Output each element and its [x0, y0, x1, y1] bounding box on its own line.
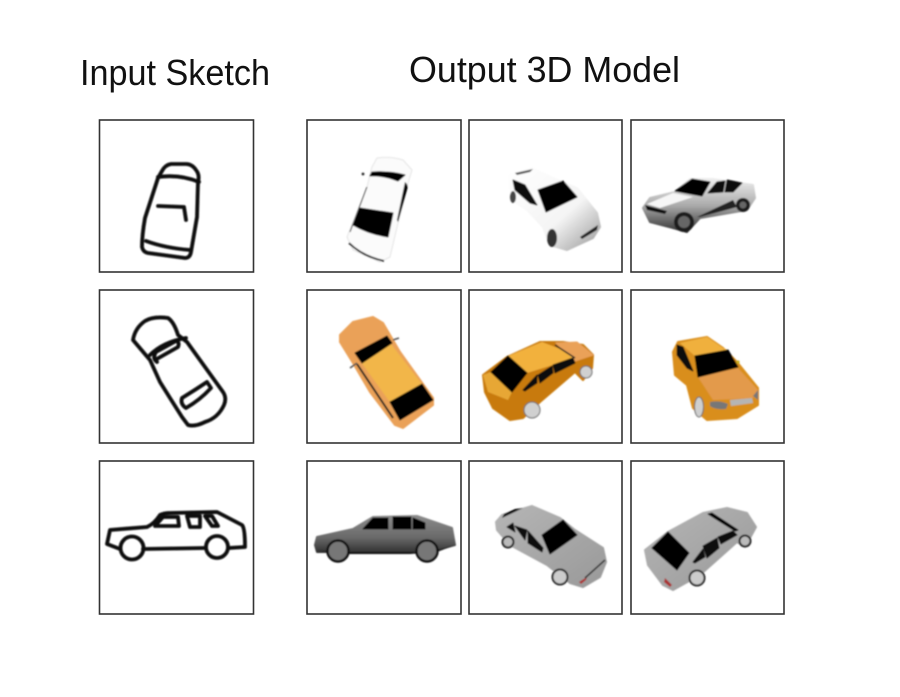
panel: grey car side view	[307, 461, 461, 614]
panel: orange car top view	[307, 290, 461, 443]
panel: grey car rear three-quarter	[631, 461, 784, 614]
panel: sketch row 1	[100, 120, 254, 272]
panel: orange car rear three-quarter	[469, 290, 622, 443]
title: input sketch: Input Sketch	[80, 52, 270, 93]
panel: white car three-quarter front	[469, 120, 622, 272]
panel: sketch row 2	[100, 290, 254, 443]
panel: orange car front three-quarter	[631, 290, 784, 443]
panel: white car side front	[631, 120, 784, 272]
title: output 3D model: Output 3D Model	[409, 49, 680, 90]
panel: white car top view	[307, 120, 461, 272]
panel: grey car front three-quarter	[469, 461, 622, 614]
panel: sketch row 3	[100, 461, 254, 614]
